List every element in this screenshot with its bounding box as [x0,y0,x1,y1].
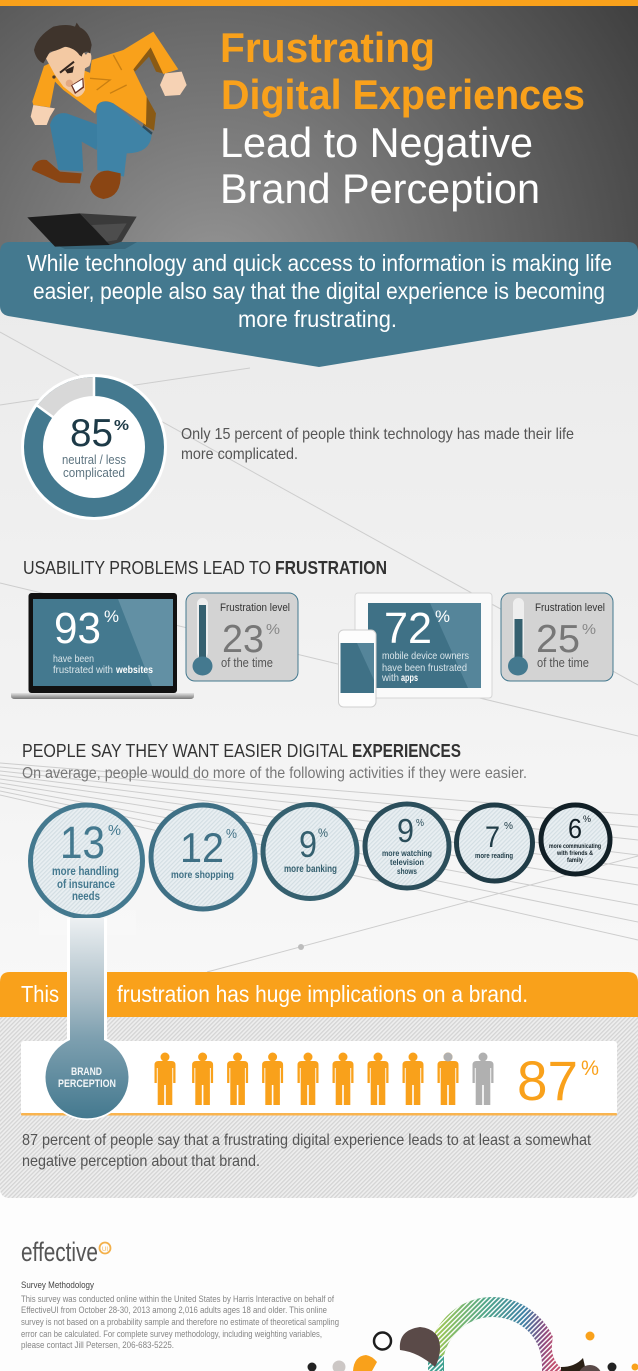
circle: 13% [30,805,142,917]
circle: 12%: more shopping [171,869,234,881]
donut value: 85 [70,412,113,455]
big thermometer [43,918,131,1120]
brand perception description: negative perception about that brand. [22,1153,260,1170]
illustration: angry man [31,23,187,199]
survey methodology text: EffectiveUI from October 28-30, 2013 among 2,016 adults ages 18 and older. This online [21,1305,327,1315]
donut label [62,452,126,480]
subheading: On average, people would do more of the following activities if they were easier. [22,765,527,782]
circle: 6%: 6 [568,813,582,844]
rainbow hatched arc [428,1297,565,1371]
top orange bar [0,0,638,6]
circle: 12%: % [226,826,237,841]
thermometer label: PERCEPTION [58,1078,116,1090]
laptop percent sign: % [104,607,119,626]
frustration level card: 25% [501,593,613,681]
circle: 9% television: television [390,857,424,867]
circle: 9% television: 9 [397,812,414,849]
thermometer icon [192,598,212,676]
tablet caption: apps [401,672,418,684]
brand perception description [22,1132,591,1170]
donut percent sign: % [114,417,129,434]
donut description: more complicated. [181,446,298,463]
title: Brand Perception [220,165,540,212]
title: Digital Experiences [221,71,585,118]
tablet value: 72 [384,604,432,653]
circle: 13%: of insurance [57,879,115,891]
card value: 25 [536,618,580,661]
circle: 6%: family [567,858,584,864]
band text end: frustration has huge implications on a brand. [117,981,528,1007]
87 value: 87 [517,1049,578,1112]
black ring [374,1332,391,1350]
title: Frustrating [220,24,435,71]
circle: 6%: with friends & [556,851,594,857]
card caption: of the time [537,655,589,670]
circle: 6% [541,805,610,874]
band text start: This [21,981,59,1007]
card background [501,593,613,681]
heading: usability problems: FRUSTRATION [275,558,387,578]
tablet caption [381,650,469,684]
circle: 13%: needs [72,891,100,903]
banner text: more frustrating. [238,306,397,332]
donut description [181,426,574,463]
donut description: Only 15 percent of people think technology has made their life [181,426,574,443]
circle: 12%: 12 [180,824,224,871]
footer background [0,1190,638,1371]
card label: Frustration level [220,602,290,614]
tablet device [355,593,492,698]
laptop shadow [50,242,137,249]
people pictogram [154,1052,494,1105]
circle: 9% television: shows [397,866,417,876]
card label: Frustration level [535,602,605,614]
orange band [0,972,638,1198]
circle: 7%: more reading [475,851,513,860]
circle: 9% banking [263,804,357,898]
laptop value: 93 [54,604,101,653]
card percent sign: % [582,621,596,638]
donut ring [21,374,167,520]
thermometer label: BRAND [71,1066,102,1078]
stem glow [39,910,136,935]
dots [308,1332,638,1371]
panel underline [21,1113,617,1116]
header background [0,6,638,300]
thermometer label [58,1066,116,1090]
thermometer icon [508,598,528,676]
survey methodology text: survey is not based on a probability sample and therefore no estimate of theoretical sampling [21,1317,339,1327]
hatched section background [0,1010,638,1198]
laptop device [11,593,194,699]
laptop panel: 93% [11,593,194,699]
circle: 13%: 13 [60,817,105,868]
circle: 9% television: more watching [382,848,432,858]
card percent sign: % [266,621,280,638]
survey methodology text: error can be calculated. For complete survey methodology, including weighting variables, [21,1329,322,1339]
survey methodology text [21,1294,339,1350]
page background [0,300,638,1000]
smashed laptop [27,213,137,247]
circle: 12% [151,805,255,909]
intro banner [0,242,638,367]
brand perception description: 87 percent of people say that a frustrating digital experience leads to at least a somewhat [22,1132,591,1149]
circle: 13%: more handling [52,866,119,878]
heading: easier digital experiences: EXPERIENCES [352,741,461,761]
circle: 7% [456,805,532,881]
band background [0,972,638,1017]
survey methodology text: This survey was conducted online within the United States by Harris Interactive on behalf of [21,1294,334,1304]
laptop caption: have been [53,653,94,665]
white panel [21,1041,617,1115]
title [220,24,585,212]
heading: easier digital experiences: PEOPLE SAY THEY WANT EASIER DIGITAL [22,741,348,761]
banner text [27,250,612,332]
87 percent sign: % [581,1057,599,1080]
tablet caption: have been frustrated [382,662,467,674]
laptop caption [53,653,153,676]
brand perception panel [21,918,617,1120]
header panel [0,6,638,300]
tablet caption: mobile device owners [382,650,469,662]
circle: 9% banking: more banking [284,864,337,875]
circle: 9% television: % [416,818,424,829]
logo: effectiveUI: UI [102,1247,108,1253]
tablet caption: with [381,672,399,684]
card background [186,593,298,681]
tablet percent sign: % [435,607,450,626]
decorative art [308,1297,638,1371]
donut label: complicated [63,465,125,480]
activity circles [30,804,610,917]
circle: 9% television [365,804,449,888]
survey methodology text: please contact Jill Petersen, 206-683-5225. [21,1340,174,1350]
circle: 9% banking: 9 [299,824,317,865]
brown blob [400,1327,440,1367]
donut label: neutral / less [62,452,126,467]
phone device [338,630,376,707]
circle: 6%: more communicating [549,844,601,850]
circle: 9% banking: % [318,826,328,840]
card caption: of the time [221,655,273,670]
card value: 23 [222,618,264,661]
survey methodology heading: Survey Methodology [21,1280,94,1291]
circle: 13%: % [108,822,121,839]
title: Lead to Negative [220,119,533,166]
circle: 6%: % [583,814,591,824]
donut chart: 85% [21,374,167,520]
banner shape [0,242,638,367]
circle: 7%: % [504,821,513,832]
laptop caption: websites [115,664,153,676]
circle: 7%: 7 [485,821,500,854]
logo: effectiveUI: effective [21,1237,98,1267]
heading: usability problems: USABILITY PROBLEMS LEAD TO [23,558,271,578]
devices panel: 72% [338,593,492,707]
laptop caption: frustrated with [53,664,113,676]
background lines [0,332,638,972]
frustration level card: 23% [186,593,298,681]
